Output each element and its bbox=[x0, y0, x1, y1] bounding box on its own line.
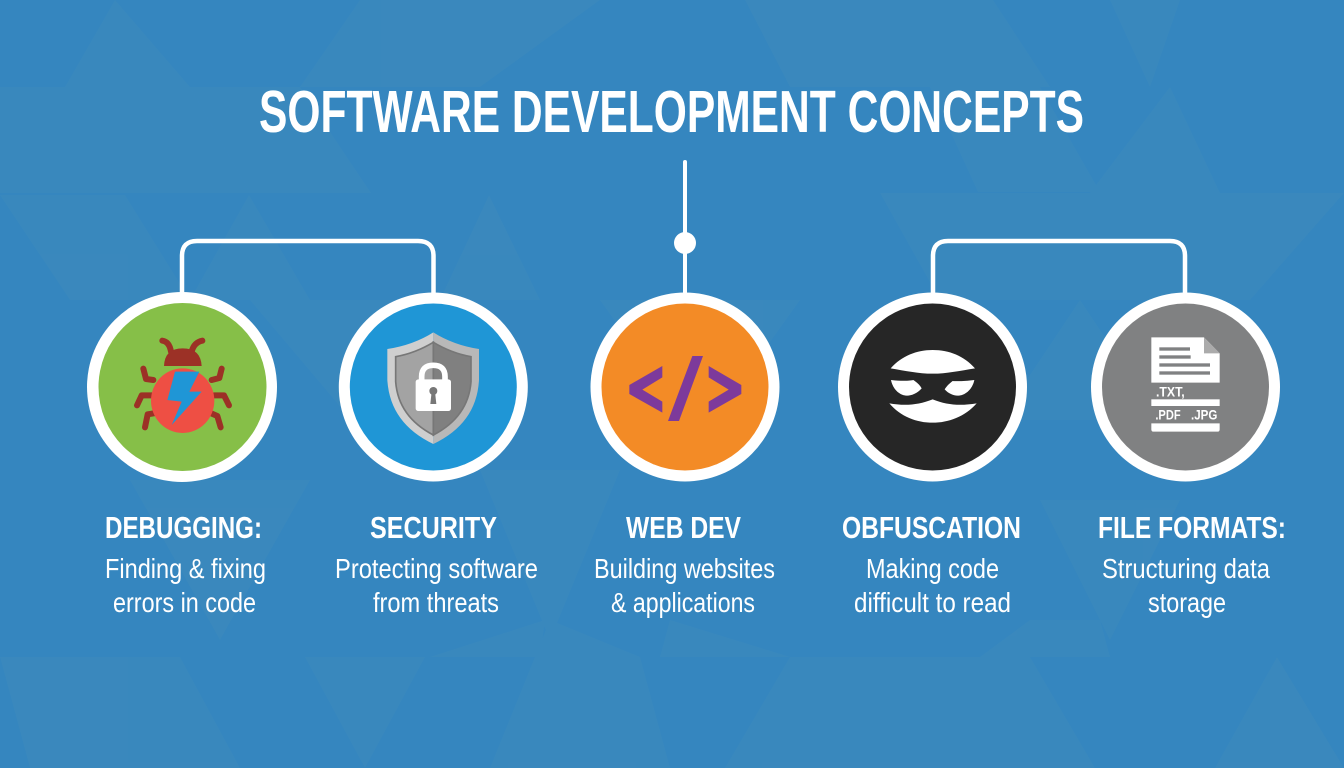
label: obfuscation bbox=[842, 510, 1021, 618]
icon: web dev code badge bbox=[590, 292, 780, 482]
icon: file formats badge: .TXT, bbox=[1156, 385, 1185, 400]
label: security bbox=[335, 510, 538, 618]
icon: obfuscation mask badge bbox=[838, 292, 1027, 482]
icon: debugging bug badge bbox=[87, 292, 277, 482]
label: web dev: Building websites bbox=[594, 553, 775, 584]
icon: file formats badge: .JPG bbox=[1191, 407, 1217, 422]
icon: file formats badge bbox=[1091, 292, 1280, 482]
label: file formats bbox=[1098, 510, 1286, 618]
connector: right bracket bbox=[933, 241, 1185, 296]
label: file formats: FILE FORMATS: bbox=[1098, 510, 1286, 545]
label: debugging: errors in code bbox=[113, 587, 256, 618]
label: web dev: WEB DEV bbox=[626, 510, 741, 545]
label: security: SECURITY bbox=[370, 510, 497, 545]
label: debugging bbox=[105, 510, 266, 618]
label: security: Protecting software bbox=[335, 553, 538, 584]
connector: center stem with dot bbox=[674, 162, 696, 296]
label: web dev: & applications bbox=[611, 587, 755, 618]
label: obfuscation: difficult to read bbox=[854, 587, 1011, 618]
label: obfuscation: Making code bbox=[866, 553, 999, 584]
label: security: from threats bbox=[373, 587, 499, 618]
label: web dev bbox=[594, 510, 775, 618]
label: file formats: Structuring data bbox=[1102, 553, 1271, 584]
connector: left bracket bbox=[182, 241, 434, 296]
icon: security shield badge bbox=[339, 292, 528, 482]
icon: file formats badge: .PDF bbox=[1155, 407, 1181, 422]
label: debugging: DEBUGGING: bbox=[105, 510, 262, 545]
label: obfuscation: OBFUSCATION bbox=[842, 510, 1021, 545]
label: file formats: storage bbox=[1148, 587, 1226, 618]
label: debugging: Finding & fixing bbox=[105, 553, 266, 584]
